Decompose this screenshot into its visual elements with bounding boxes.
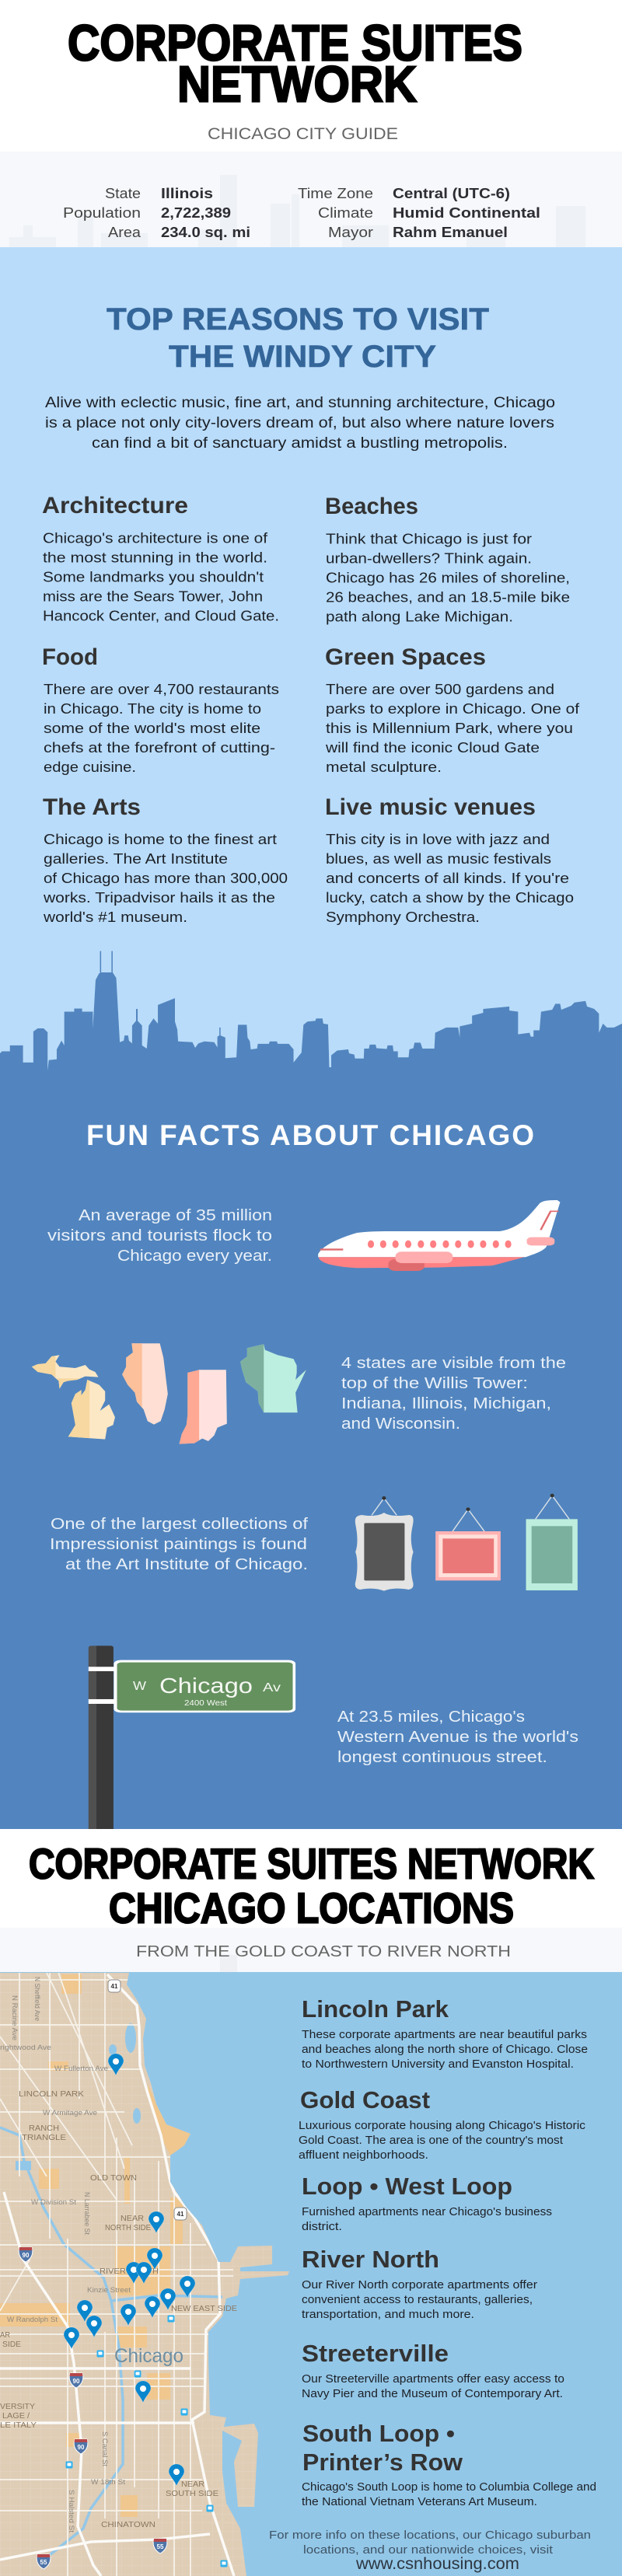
reason: green spaces: parks to explore in Chicago. One of [326,701,580,717]
icon: four states [32,1343,306,1444]
footer call to action [269,2529,591,2573]
map labels [0,2090,237,2529]
reason: beaches [325,494,570,625]
location: south loop and printers row [302,2420,596,2508]
icon: green frame [526,1494,578,1590]
map labels: NEW EAST SIDE [171,2305,237,2313]
street labels: S Halsted St [68,2490,75,2533]
fact text: visitors: An average of 35 million [79,1207,272,1224]
location: loop and west loop [302,2173,552,2233]
icon: street sign post [89,1646,295,1829]
map labels: LINCOLN PARK [19,2090,84,2099]
location: gold coast: affluent neighborhoods. [299,2148,428,2162]
footer call to action: locations, and our nationwide choices, visit [303,2543,554,2557]
highway shields: 41 [177,2211,184,2218]
reason: food: chefs at the forefront of cutting- [44,740,275,756]
reason: green spaces: this is Millennium Park, where you [326,721,573,736]
panel: city stats band [0,152,622,247]
sign text: W [133,1680,147,1693]
orange patches [0,1974,190,2517]
intro paragraph: can find a bit of sanctuary amidst a bustling metropolis. [92,435,508,452]
heading: top reasons: TOP REASONS TO VISIT [107,302,489,337]
footer call to action: www.csnhousing.com [355,2555,519,2573]
reason: green spaces: Green Spaces [325,644,486,670]
location: gold coast [299,2086,586,2162]
reason: beaches: urban-dwellers? Think again. [326,550,532,566]
fact text: paintings: at the Art Institute of Chicago. [65,1556,308,1573]
icon: picture frames [355,1494,578,1591]
map labels: VERSITY [0,2403,35,2411]
reason: food [42,644,279,775]
heading: locations [29,1839,594,1932]
street labels: W Randolph St [7,2316,58,2323]
street labels: S Canal St [101,2431,109,2467]
highway shields: 55 [40,2559,47,2566]
reason: beaches: Chicago has 26 miles of shoreline, [326,571,570,586]
city label: Chicago [114,2345,183,2367]
reason: live music venues: lucky, catch a show by the Chicago [326,890,574,906]
map labels: NEAR [121,2215,144,2223]
heading: top reasons [107,302,489,374]
panel: map section background [0,1972,622,2576]
reason: live music venues [325,794,574,925]
intro paragraph: is a place not only city-lovers dream of, but also where nature lovers [45,415,554,431]
map labels: SOUTH SIDE [166,2490,218,2498]
reason: architecture: the most stunning in the world. [43,550,267,566]
location: gold coast: Gold Coast. The area is one of the country's most [299,2134,564,2147]
fact text: states: 4 states are visible from the [341,1355,566,1372]
faint skyline background [9,175,585,247]
panel: locations header [0,1829,622,1932]
reason: architecture: Some landmarks you shouldn't [43,569,264,585]
highway shields: 90 [23,2252,30,2259]
stats: right column: Mayor [328,225,373,240]
sign text: 2400 West [184,1699,227,1708]
reason: architecture: Chicago's architecture is one of [43,530,268,546]
reason: green spaces [325,644,580,775]
map labels: LAGE / [2,2412,30,2421]
heading: fun facts: FUN FACTS ABOUT CHICAGO [86,1119,534,1151]
panel: page header [0,0,622,152]
stats: right column: Central (UTC-6) [393,186,510,201]
location: streeterville: Navy Pier and the Museum of Contemporary Art. [302,2387,563,2400]
reason: architecture: miss are the Sears Tower, John [43,589,263,605]
fact text: paintings [50,1516,309,1573]
fact text: western avenue: Western Avenue is the world's [337,1729,578,1746]
location markers [64,2054,195,2486]
street labels: Kinzie Street [87,2286,131,2294]
sign text: Av [263,1681,281,1695]
location: lincoln park: Lincoln Park [302,1995,449,2023]
map of chicago [0,1972,295,2576]
location: south loop and printers row: South Loop • [302,2420,455,2447]
reason: the arts: galleries. The Art Institute [44,851,228,867]
stats: left column [63,186,250,240]
title [68,14,522,112]
reason: green spaces: metal sculpture. [326,759,442,775]
fact text: states: and Wisconsin. [341,1415,460,1433]
transit icons [65,2315,227,2567]
reason: food: Food [42,644,98,670]
reason: live music venues: This city is in love with jazz and [326,832,550,847]
location: gold coast: Luxurious corporate housing along Chicago's Historic [299,2119,586,2132]
fact text: western avenue: At 23.5 miles, Chicago's [337,1709,525,1726]
fact text: paintings: Impressionist paintings is found [50,1536,307,1553]
rivers and lagoons [0,2127,222,2557]
map labels: LE ITALY [0,2421,37,2430]
location: loop and west loop: Loop • West Loop [302,2173,512,2200]
location: loop and west loop: Furnished apartments near Chicago's business [302,2205,552,2218]
location: south loop and printers row: Printer’s Row [302,2449,463,2476]
map labels: RIVER NORTH [100,2267,159,2276]
street labels [0,1977,131,2533]
fact text: states: top of the Willis Tower: [341,1375,528,1392]
icon: indiana [180,1370,227,1444]
reason: architecture: Architecture [42,493,188,518]
street labels: N Racine Ave [11,1995,19,2040]
icon: michigan [32,1355,115,1440]
reason: green spaces: There are over 500 gardens and [326,682,554,697]
street labels: N Sheffield Ave [33,1977,41,2021]
panel: fun facts [0,1088,622,1829]
icon: wisconsin [240,1344,306,1412]
highway shields: 90 [73,2378,80,2385]
map labels: OLD TOWN [90,2174,137,2183]
reason: live music venues: Symphony Orchestra. [326,909,480,925]
expressways [0,1974,234,2576]
stats: right column: Rahm Emanuel [393,225,508,240]
map labels: AR [0,2331,10,2340]
intro paragraph [45,395,555,452]
footer call to action: For more info on these locations, our Chicago suburban [269,2529,591,2542]
fact text: visitors [47,1207,272,1265]
reason: food: edge cuisine. [44,759,136,775]
highway shields [19,1980,187,2569]
location: south loop and printers row: the National Vietnam Veterans Art Museum. [302,2495,537,2508]
fact text: paintings: One of the largest collections of [51,1516,309,1533]
subtitle: locations: FROM THE GOLD COAST TO RIVER NORTH [136,1943,511,1960]
panel: top reasons [0,247,622,1088]
fact text: visitors: visitors and tourists flock to [47,1227,272,1244]
fact text: western avenue [337,1709,578,1766]
fact text: states: Indiana, Illinois, Michigan, [341,1395,551,1412]
reason: live music venues: Live music venues [325,794,536,820]
reason: beaches: Beaches [325,494,418,519]
location: river north [302,2246,537,2321]
reason: beaches: Think that Chicago is just for [326,532,532,547]
reason: the arts: Chicago is home to the finest art [44,832,277,847]
sign text: Chicago [159,1674,253,1698]
map labels: TRIANGLE [22,2134,66,2142]
stats: left column: State [105,186,141,201]
title: CORPORATE SUITES [68,14,522,72]
reason: the arts: works. Tripadvisor hails it as the [43,890,275,906]
street labels: N Larrabee St [83,2192,91,2235]
location: streeterville: Our Streeterville apartments offer easy access to [302,2372,564,2386]
highway shields: 55 [157,2543,164,2550]
stats: right column [298,186,540,240]
location: river north: Our River North corporate apartments offer [302,2278,537,2292]
reason: food: There are over 4,700 restaurants [44,682,279,697]
location: river north: transportation, and much more. [302,2308,474,2321]
location: lincoln park: to Northwestern University and Evanston Hospital. [302,2058,574,2071]
subtitle: CHICAGO CITY GUIDE [208,125,398,143]
stats: right column: Time Zone [298,186,373,201]
reason: the arts: The Arts [43,794,141,820]
map labels: CHINATOWN [101,2521,156,2529]
reason: live music venues: blues, as well as music festivals [326,851,551,867]
location: lincoln park: These corporate apartments are near beautiful parks [302,2028,587,2041]
map labels: RANCH [29,2124,59,2133]
location: south loop and printers row: Chicago's South Loop is home to Columbia College and [302,2480,596,2494]
title: NETWORK [177,56,417,112]
icon: illinois [122,1343,168,1425]
reason: architecture [42,493,279,623]
reason: architecture: Hancock Center, and Cloud Gate. [43,608,279,623]
location: loop and west loop: district. [302,2220,342,2233]
reason: food: some of the world's most elite [44,721,260,736]
intro paragraph: Alive with eclectic music, fine art, and stunning architecture, Chicago [45,395,555,411]
street labels: W Division St [31,2198,77,2206]
icon: airplane [318,1200,560,1271]
street labels: W Armitage Ave [43,2109,97,2117]
map labels: NORTH SIDE [105,2224,151,2232]
reason: beaches: 26 beaches, and an 18.5-mile bike [326,589,570,605]
heading: top reasons: THE WINDY CITY [169,340,436,374]
heading: locations: CHICAGO LOCATIONS [109,1884,514,1932]
location: streeterville [302,2340,564,2400]
stats: left column: 234.0 sq. mi [161,225,250,240]
fact text: states [341,1355,566,1433]
reason: green spaces: will find the iconic Cloud Gate [325,740,540,756]
fact text: visitors: Chicago every year. [117,1248,272,1265]
location: streeterville: Streeterville [302,2340,449,2367]
stats: left column: 2,722,389 [161,205,231,221]
reason: the arts [43,794,288,925]
stats: left column: Illinois [161,186,213,201]
highway shields: 90 [78,2444,85,2451]
icon: red frame [435,1507,501,1580]
street labels: W 18th St [91,2478,126,2486]
sign text [133,1674,281,1708]
stats: left column: Area [108,225,142,240]
map labels: NEAR [181,2480,204,2489]
icon: grey frame [355,1496,414,1591]
skyline silhouette [0,951,622,1089]
street labels: rightwood Ave [0,2044,51,2051]
highway shields: 41 [111,1983,118,1990]
reason: the arts: of Chicago has more than 300,000 [44,871,288,886]
stats: left column: Population [63,205,141,221]
reason: the arts: world's #1 museum. [43,909,187,925]
location: lincoln park: and beaches along the north shore of Chicago. Close [302,2043,588,2056]
reason: beaches: path along Lake Michigan. [326,609,513,625]
reason: food: in Chicago. The city is home to [44,701,261,717]
street labels: W Fullerton Ave [54,2065,108,2072]
stats: right column: Climate [318,205,373,221]
reason: live music venues: and concerts of all kinds. If you're [326,871,569,886]
panel: subtitle band [0,1928,622,1972]
stats: right column: Humid Continental [393,205,540,221]
location: river north: convenient access to restaurants, galleries, [302,2293,533,2306]
location: gold coast: Gold Coast [300,2086,430,2114]
location: river north: River North [302,2246,439,2273]
location: lincoln park [302,1995,588,2071]
fact text: western avenue: longest continuous street. [337,1749,547,1766]
road grid [0,1972,233,2576]
map labels: SIDE [2,2340,21,2349]
